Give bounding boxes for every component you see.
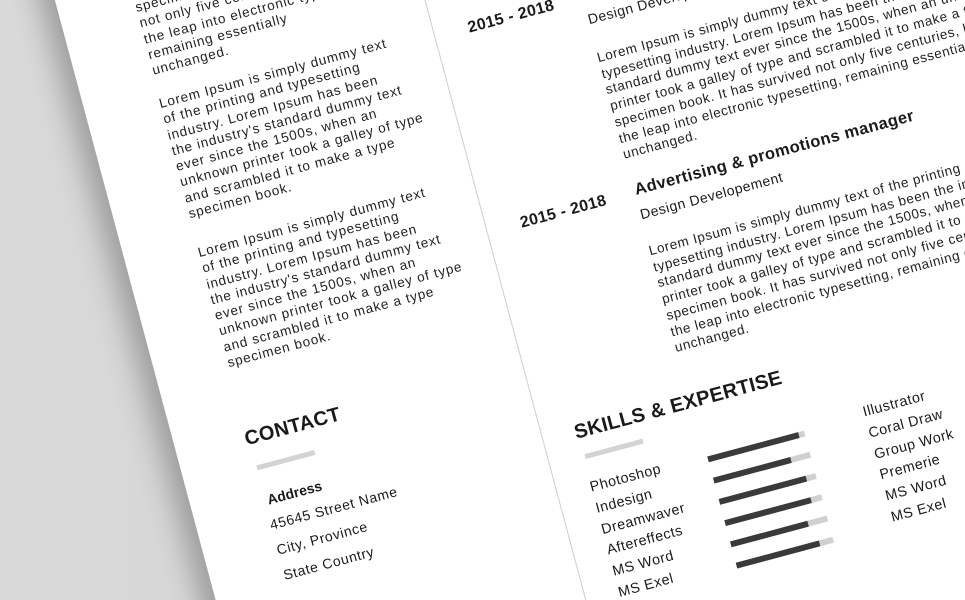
- contact section: [242, 403, 399, 583]
- address lines: 45645 Street Name: [268, 483, 399, 533]
- left column: paragraph 2: [157, 36, 425, 221]
- left column: paragraph 3: and scrambled it to make a type: [222, 284, 436, 355]
- experience entry 1: [466, 0, 965, 162]
- address lines: City, Province: [275, 518, 369, 558]
- job title: Advertising & promotions manager: [633, 107, 916, 199]
- left column: paragraph 2: Lorem Ipsum is simply dummy text: [157, 36, 388, 111]
- left column: paragraph 2: the industry's standard dummy text: [170, 82, 404, 158]
- skills list right: MS Word: [884, 473, 949, 505]
- skills list right: Coral Draw: [867, 406, 945, 441]
- left column: paragraph 3: unknown printer took a galley of type: [217, 259, 464, 339]
- left column: paragraph 2: ever since the 1500s, when an: [174, 106, 379, 174]
- skills section: [572, 367, 956, 600]
- skills list left: Indesign: [594, 486, 654, 517]
- address lines: [268, 483, 399, 583]
- date: 2015 - 2018: [518, 192, 608, 232]
- skills list right: [861, 388, 956, 526]
- left column: paragraph 3: Lorem Ipsum is simply dummy text: [196, 185, 427, 260]
- skill bars: [707, 430, 834, 568]
- left column: paragraph 2: industry. Lorem Ipsum has been: [166, 72, 380, 143]
- skills list right: Illustrator: [861, 388, 927, 420]
- heading: skills: SKILLS & EXPERTISE: [572, 367, 785, 444]
- skills list left: MS Word: [611, 548, 676, 580]
- skills list left: MS Exel: [617, 571, 675, 600]
- left column: paragraph 2: specimen book.: [187, 179, 294, 221]
- experience entry 2: [518, 107, 965, 355]
- skills list left: [588, 461, 687, 600]
- left column: paragraph 1: unchanged.: [151, 43, 231, 78]
- left column: paragraph 3: specimen book.: [226, 328, 332, 370]
- skills list left: Aftereffects: [605, 523, 685, 559]
- left column: paragraph 3: [196, 185, 464, 370]
- skills list right: Group Work: [872, 426, 956, 462]
- left column: paragraph 3: industry. Lorem Ipsum has been: [205, 221, 419, 292]
- skills list left: Dreamwaver: [600, 500, 687, 538]
- description: [647, 153, 965, 355]
- left column: paragraph 2: of the printing and typesetting: [162, 60, 362, 127]
- address lines: State Country: [282, 544, 376, 583]
- left column: paragraph 1: [134, 0, 348, 78]
- left column: paragraph 1: remaining essentially: [146, 10, 289, 62]
- skills list right: Premerie: [878, 452, 942, 484]
- left column: paragraph 2: unknown printer took a galley of type: [178, 110, 425, 190]
- left column: paragraph 2: and scrambled it to make a type: [183, 135, 397, 206]
- address label: Address: [265, 478, 324, 508]
- left column: paragraph 3: the industry's standard dummy text: [209, 231, 443, 307]
- description: unchanged.: [673, 321, 751, 355]
- subtitle: Design Developement: [638, 169, 785, 222]
- skills list right: MS Exel: [889, 496, 948, 526]
- left column: paragraph 3: of the printing and typesetting: [200, 209, 401, 276]
- description: unchanged.: [621, 128, 699, 162]
- heading: contact: CONTACT: [242, 403, 343, 450]
- skills list left: Photoshop: [588, 461, 663, 496]
- left column: paragraph 3: ever since the 1500s, when an: [213, 255, 418, 323]
